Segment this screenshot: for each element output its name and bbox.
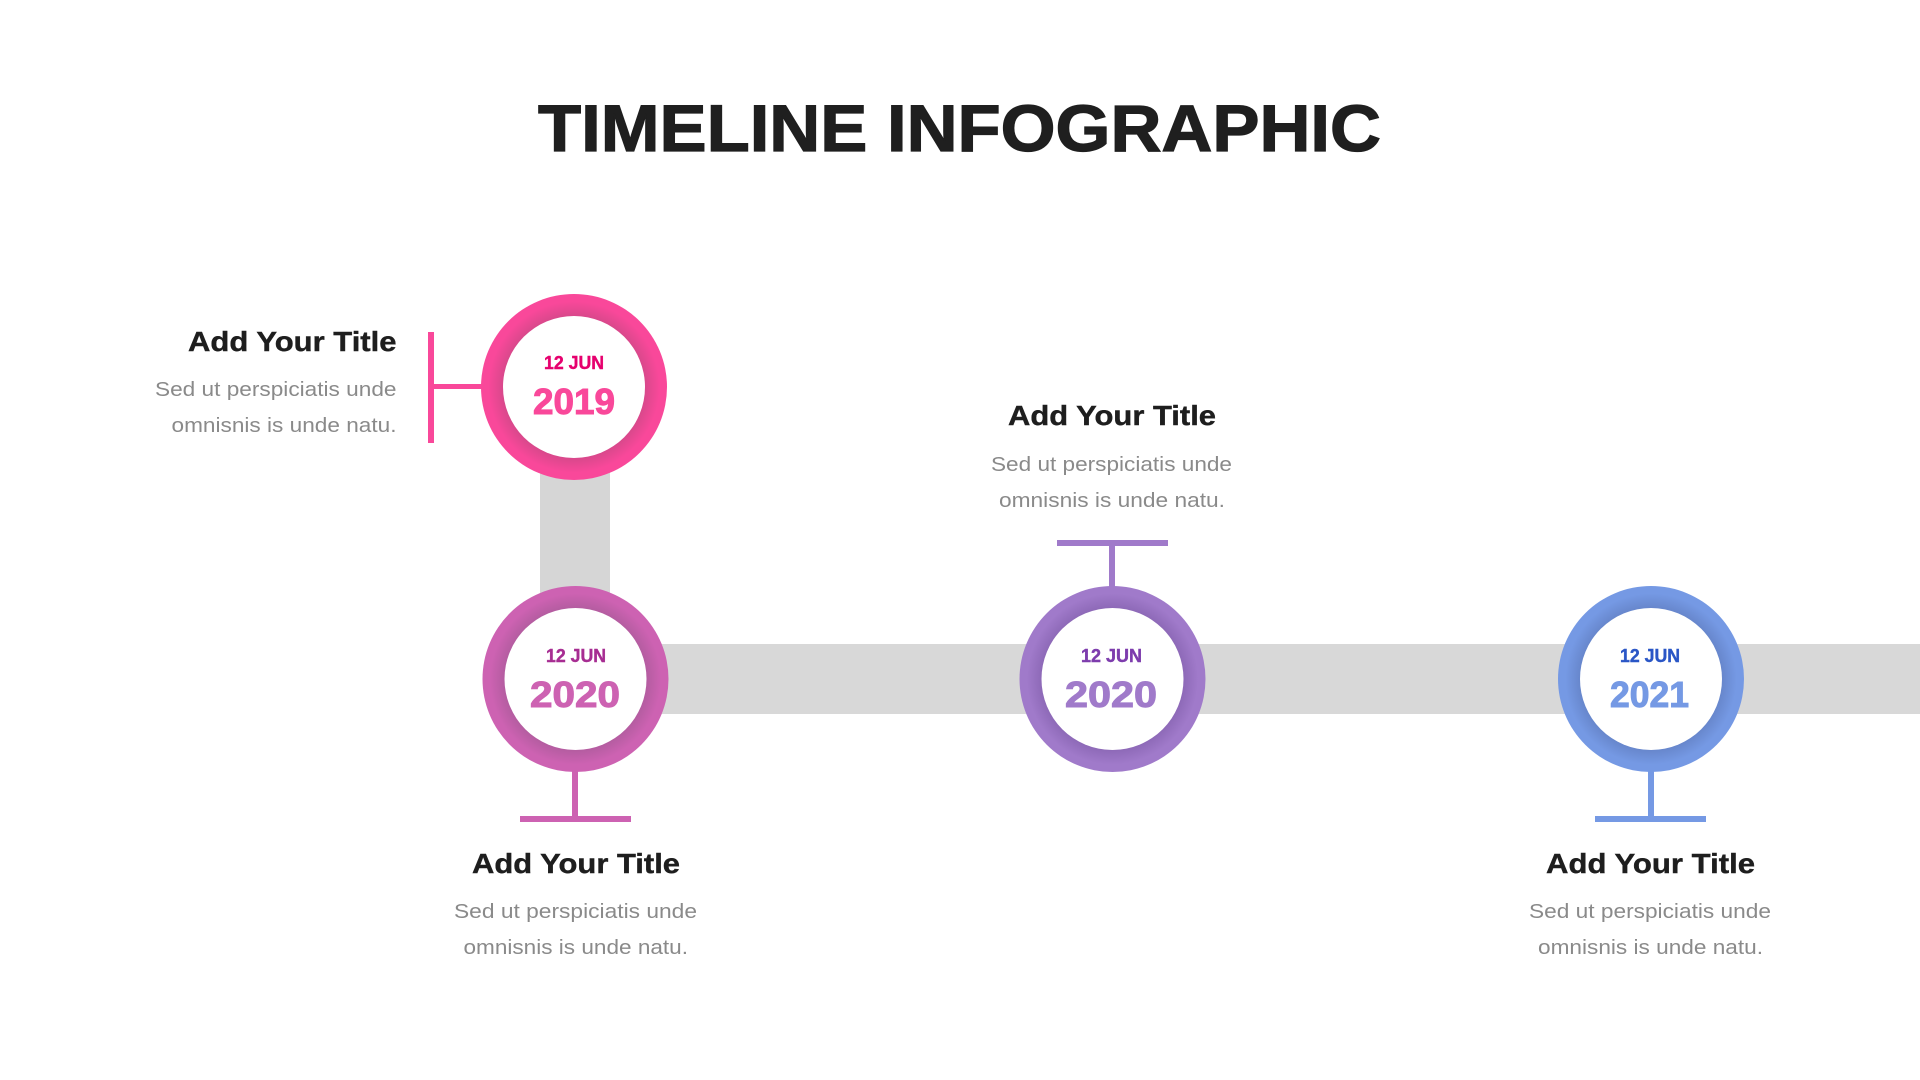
description: omnisnis is unde natu. [1538,936,1763,959]
heading: Add Your Title [472,848,680,879]
connector: pink [428,332,484,443]
description: omnisnis is unde natu. [999,489,1225,512]
title: TIMELINE INFOGRAPHIC [538,91,1381,165]
date: 12 JUN [1081,646,1142,666]
heading: Add Your Title [1008,400,1216,431]
ring: pink [481,294,667,480]
description: omnisnis is unde natu. [464,936,688,959]
timeline track [540,460,1920,714]
ring: blue [1558,586,1744,772]
description [155,378,396,437]
milestone 2: 2020 [454,586,697,959]
year: 2020 [1065,674,1157,715]
connector: blue [1595,768,1706,822]
description: Sed ut perspiciatis unde [155,378,396,401]
connector: magenta [520,768,631,822]
inner disc [1042,608,1184,750]
description [454,900,697,959]
year: 2019 [533,381,615,422]
inner disc [503,316,645,458]
heading: Add Your Title [1546,848,1755,879]
description: omnisnis is unde natu. [172,414,396,437]
date: 12 JUN [544,353,604,373]
ring: magenta [482,586,668,772]
milestone 1: 2019 [155,294,667,480]
description: Sed ut perspiciatis unde [991,453,1232,476]
date: 12 JUN [546,646,606,666]
date: 12 JUN [1620,646,1680,666]
description: Sed ut perspiciatis unde [454,900,697,923]
milestone 4: 2021 [1529,586,1771,959]
inner disc [504,608,646,750]
inner disc [1580,608,1722,750]
year: 2020 [530,674,620,715]
heading: Add Your Title [188,326,396,357]
description [1529,900,1771,959]
ring: violet [1020,586,1206,772]
description: Sed ut perspiciatis unde [1529,900,1771,923]
description [991,453,1232,512]
year: 2021 [1610,674,1689,715]
connector: violet [1057,540,1168,590]
milestone 3: 2020 [991,400,1232,772]
